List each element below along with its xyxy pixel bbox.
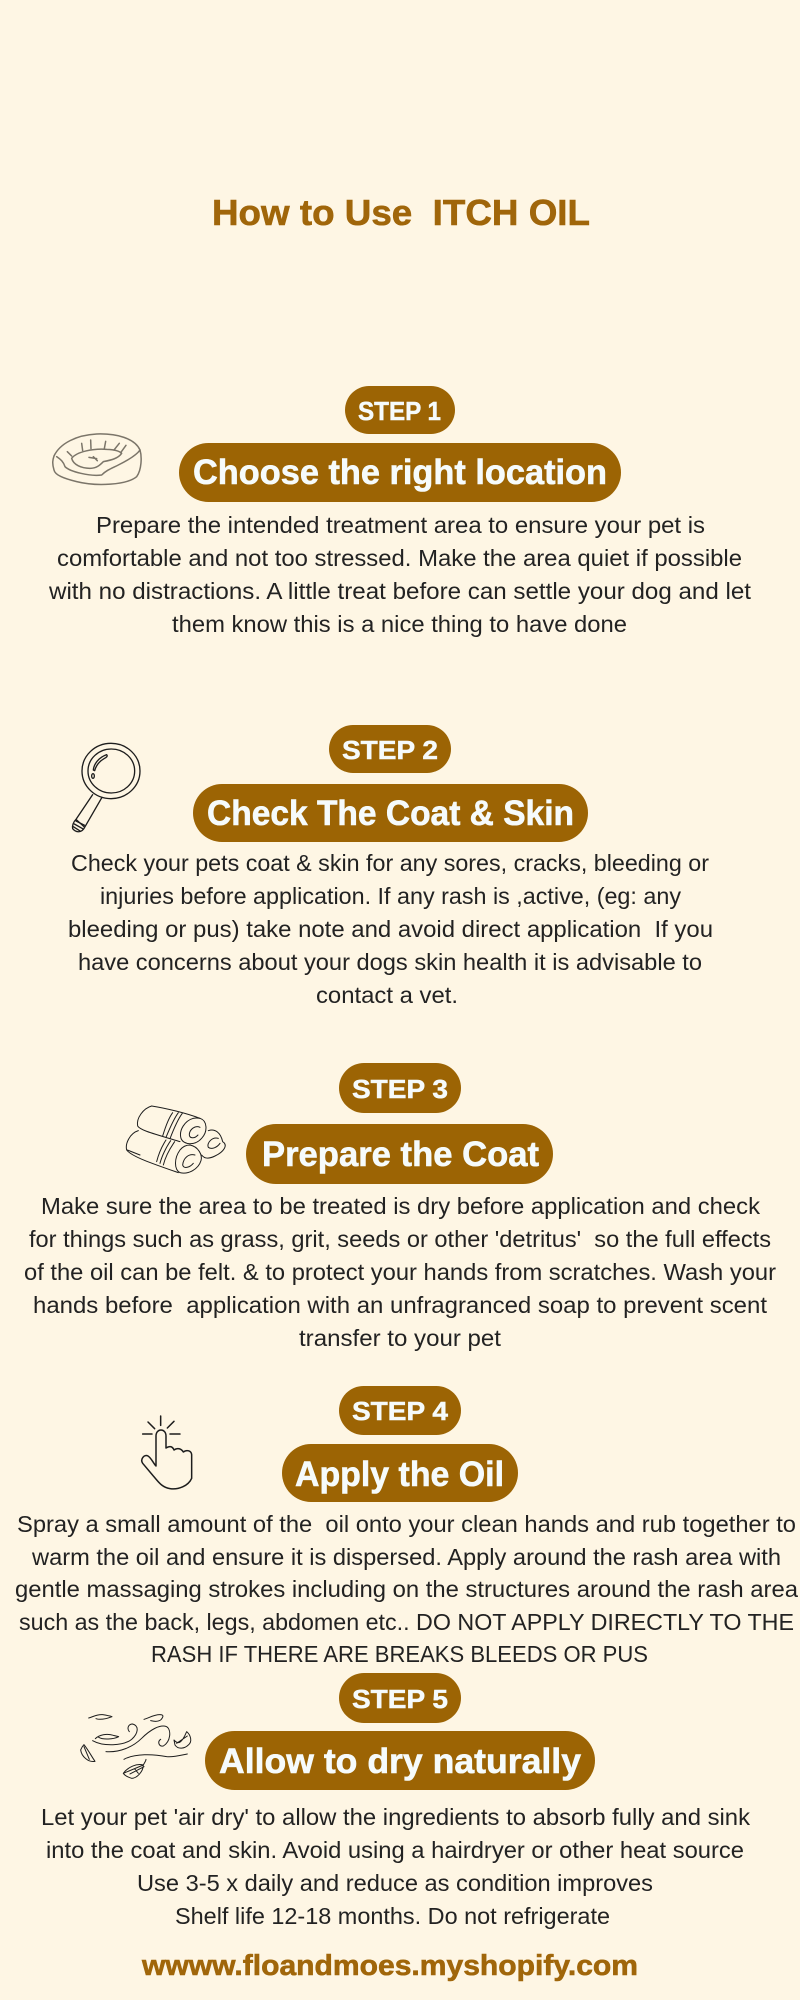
step 5 badge	[339, 1673, 461, 1723]
step 4 heading: Apply the Oil	[295, 1455, 504, 1494]
step 1 text: them know this is a nice thing to have done	[172, 611, 627, 637]
step 4 text: gentle massaging strokes including on the structures around the rash area	[15, 1576, 799, 1602]
step 2 badge	[329, 725, 451, 773]
step 1 text	[48, 512, 751, 637]
footer website: wwww.floandmoes.myshopify.com	[141, 1950, 638, 1982]
step 4 text: warm the oil and ensure it is dispersed. Apply around the rash area with	[31, 1544, 781, 1570]
step 2 text: Check your pets coat & skin for any sores, cracks, bleeding or	[71, 850, 709, 876]
step 5 heading	[205, 1731, 595, 1790]
step 5 text: Use 3-5 x daily and reduce as condition improves	[137, 1870, 653, 1896]
step 1 heading	[179, 443, 621, 502]
panel: step 1	[48, 386, 751, 637]
panel: step 2	[68, 725, 713, 1008]
step 3 text: transfer to your pet	[299, 1325, 501, 1351]
step 5 text: into the coat and skin. Avoid using a hairdryer or other heat source	[46, 1837, 744, 1863]
step 3 text: Make sure the area to be treated is dry before application and check	[41, 1193, 760, 1219]
step 5 text: Shelf life 12-18 months. Do not refrigerate	[175, 1903, 610, 1929]
step 2 text: bleeding or pus) take note and avoid direct application If you	[68, 916, 713, 942]
step 3 heading	[246, 1124, 553, 1184]
step 3 text	[24, 1193, 776, 1351]
step 4 text: such as the back, legs, abdomen etc.. DO NOT APPLY DIRECTLY TO THE	[19, 1609, 794, 1635]
step 5 text: Let your pet 'air dry' to allow the ingredients to absorb fully and sink	[41, 1804, 750, 1830]
step 2 heading	[193, 784, 588, 842]
step 1 badge	[345, 386, 455, 434]
step 5 text	[41, 1804, 750, 1929]
step 2 text: have concerns about your dogs skin health it is advisable to	[78, 949, 702, 975]
title: How to Use ITCH OIL	[212, 192, 590, 233]
step 5 badge: STEP 5	[352, 1684, 448, 1714]
step 3 badge: STEP 3	[352, 1074, 448, 1104]
step 2 text: contact a vet.	[316, 982, 458, 1008]
step 5 heading: Allow to dry naturally	[219, 1742, 582, 1781]
step 2 badge: STEP 2	[342, 735, 438, 765]
step 3 text: for things such as grass, grit, seeds or other 'detritus' so the full effects	[29, 1226, 771, 1252]
panel: step 3	[24, 1063, 776, 1351]
step 2 text	[68, 850, 713, 1008]
step 4 badge	[339, 1386, 461, 1435]
step 1 heading: Choose the right location	[193, 453, 607, 492]
icon: magnifying glass	[72, 743, 140, 832]
step 3 badge	[339, 1063, 461, 1113]
step 1 badge: STEP 1	[358, 396, 441, 426]
step 4 text: Spray a small amount of the oil onto your clean hands and rub together to	[17, 1511, 796, 1537]
step 4 badge: STEP 4	[352, 1396, 449, 1426]
step 3 heading: Prepare the Coat	[262, 1135, 539, 1174]
icon: tapping hand	[142, 1416, 192, 1489]
step 2 heading: Check The Coat & Skin	[207, 794, 574, 833]
step 4 text: RASH IF THERE ARE BREAKS BLEEDS OR PUS	[151, 1641, 648, 1667]
step 1 text: comfortable and not too stressed. Make the area quiet if possible	[57, 545, 742, 571]
icon: wind and leaves	[81, 1715, 191, 1778]
step 4 heading	[282, 1444, 518, 1502]
icon: rolled towels	[126, 1106, 225, 1173]
step 3 text: of the oil can be felt. & to protect your hands from scratches. Wash your	[24, 1259, 776, 1285]
panel: step 5	[41, 1673, 750, 1929]
step 1 text: with no distractions. A little treat before can settle your dog and let	[48, 578, 751, 604]
panel: step 4	[15, 1386, 799, 1667]
step 2 text: injuries before application. If any rash is ,active, (eg: any	[100, 883, 681, 909]
step 1 text: Prepare the intended treatment area to ensure your pet is	[96, 512, 705, 538]
icon: pet bed	[53, 434, 141, 484]
step 4 text	[15, 1511, 799, 1667]
step 3 text: hands before application with an unfragranced soap to prevent scent	[33, 1292, 767, 1318]
